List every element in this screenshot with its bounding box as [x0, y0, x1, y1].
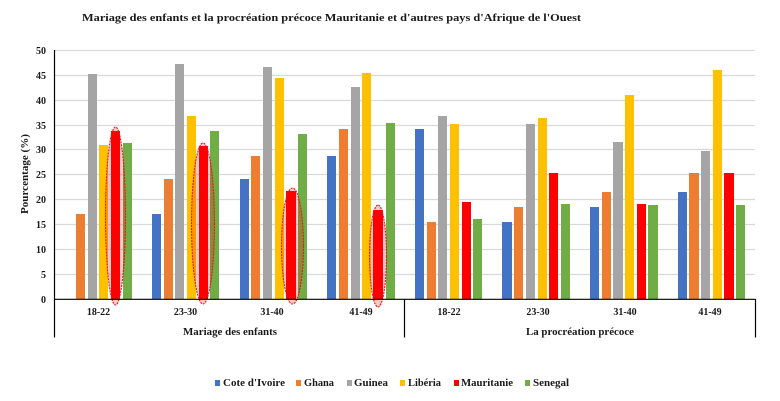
- bars: 18-22: [415, 116, 482, 299]
- y axis title: Pourcentage (%): [19, 134, 31, 214]
- group label: Mariage des enfants: Mariage des enfants: [183, 327, 277, 338]
- group label: La procréation précoce: La procréation précoce: [526, 327, 634, 338]
- age group labels: 23-30: [174, 307, 197, 318]
- y axis tick labels: 35: [36, 121, 46, 132]
- age group labels: [87, 307, 722, 318]
- legend: Libéria: Libéria: [408, 378, 442, 389]
- age group labels: 41-49: [349, 307, 373, 318]
- age group labels: 23-30: [526, 307, 550, 318]
- y axis tick labels: 15: [36, 220, 46, 231]
- bars: 23-30: [502, 118, 570, 299]
- legend: Mauritanie: Mauritanie: [461, 378, 513, 389]
- bars: 18-22: [76, 74, 132, 299]
- title: Mariage des enfants et la procréation précoce Mauritanie et d'autres pays d'Afrique de l'Ouest: [82, 12, 581, 24]
- y axis tick labels: 40: [36, 96, 46, 107]
- y axis tick labels: 45: [36, 71, 46, 82]
- y axis tick labels: [36, 46, 46, 306]
- bars: 31-40: [590, 95, 658, 299]
- bars: 31-40: [240, 67, 307, 299]
- age group labels: 18-22: [437, 307, 461, 318]
- bars: Mariage des enfants: [76, 64, 395, 299]
- y axis tick labels: 30: [36, 145, 46, 156]
- y axis tick labels: 0: [41, 295, 46, 306]
- legend: Guinea: Guinea: [354, 378, 389, 389]
- age group labels: 31-40: [613, 307, 637, 318]
- age group labels: 41-49: [698, 307, 722, 318]
- bars: 23-30: [152, 64, 219, 299]
- axes: [54, 50, 756, 338]
- bars: 41-49: [327, 73, 395, 299]
- y axis tick labels: 25: [36, 170, 46, 181]
- highlight ellipses: Mauritanie: [106, 127, 386, 307]
- age group labels: 18-22: [87, 307, 110, 318]
- y axis tick labels: 20: [36, 195, 46, 206]
- bars: 41-49: [678, 70, 745, 299]
- y axis tick labels: 50: [36, 46, 46, 57]
- y axis tick labels: 5: [41, 270, 46, 281]
- age group labels: 31-40: [260, 307, 284, 318]
- legend: Ghana: Ghana: [304, 378, 335, 389]
- y axis tick labels: 10: [36, 245, 46, 256]
- legend: Cote d'Ivoire: Cote d'Ivoire: [223, 378, 285, 389]
- legend: Senegal: Senegal: [533, 378, 569, 389]
- legend: [215, 378, 569, 389]
- bars: La procréation précoce: [415, 70, 745, 299]
